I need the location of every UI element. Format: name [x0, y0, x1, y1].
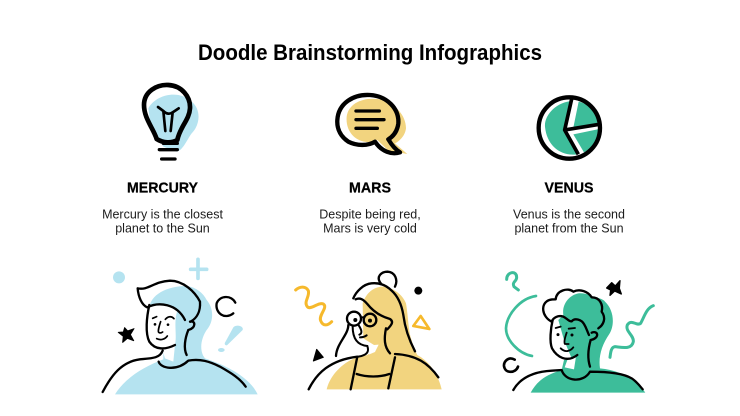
icon: pie chart [539, 97, 600, 159]
black star [118, 328, 134, 342]
glasses [347, 312, 361, 326]
face details [153, 317, 174, 340]
letter C doodle [216, 297, 235, 316]
white neck patch [369, 345, 379, 355]
text: Mars description [319, 208, 421, 236]
illustration: man with short hair [103, 259, 258, 394]
face details [556, 327, 575, 351]
text: Mercury description [102, 208, 223, 236]
black star [607, 281, 621, 295]
text: Venus description: Venus is the second [513, 208, 625, 222]
yellow body and hair shape [327, 287, 442, 389]
black dot [414, 287, 422, 295]
face outline [147, 305, 175, 348]
title: Doodle Brainstorming Infographics [198, 40, 542, 65]
text: Mars description: Despite being red, [319, 208, 421, 222]
heading: Mercury: MERCURY [127, 180, 198, 196]
blue decorations [113, 271, 125, 283]
bun [379, 272, 396, 287]
text: Mercury description: planet to the Sun [115, 222, 210, 236]
green squiggle [610, 306, 653, 357]
text: Mercury description: Mercury is the closest [102, 208, 223, 222]
icon: speech bubble [337, 95, 407, 154]
heading: Venus: VENUS [544, 180, 594, 196]
shoulders and collar [103, 351, 246, 392]
text: Venus description [513, 208, 625, 236]
hair outline [543, 290, 604, 328]
hair outline [138, 281, 200, 322]
white face patch [147, 305, 177, 362]
green body and hair shape [531, 293, 645, 393]
text: Mars description: Mars is very cold [323, 222, 417, 236]
illustration: person with curly hair [504, 273, 653, 393]
text: Venus description: planet from the Sun [514, 222, 624, 236]
green question mark [507, 273, 518, 290]
face outline [551, 320, 577, 359]
green arc [506, 296, 536, 356]
shoulders and collar [513, 370, 643, 390]
illustration: woman with glasses [296, 272, 442, 389]
black triangle [313, 349, 323, 361]
hair outline [353, 283, 415, 351]
yellow decorations [296, 287, 332, 325]
white neck patch [565, 357, 576, 369]
face details [353, 325, 368, 357]
blue body and hair shape [115, 286, 258, 394]
shoulders and top [309, 354, 438, 389]
icon: light bulb [144, 85, 199, 159]
black ring [504, 358, 518, 372]
heading: Mars: MARS [349, 180, 391, 196]
